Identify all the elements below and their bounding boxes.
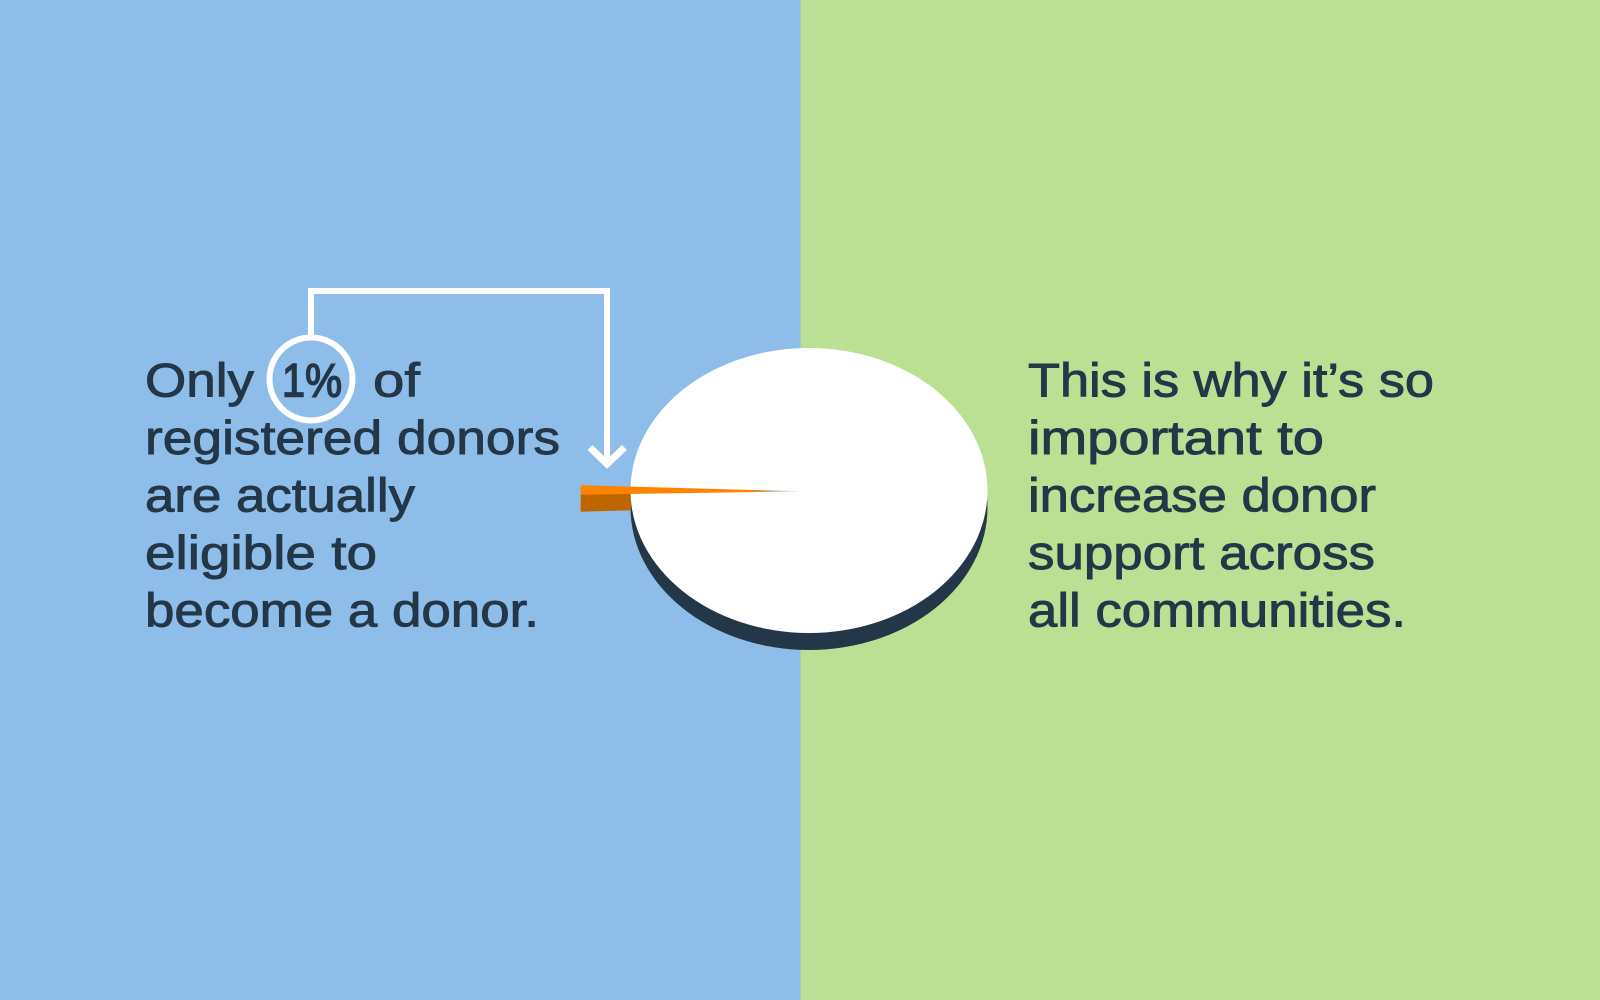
text: This is why it's so: This is why it’s so (1028, 354, 1434, 406)
text: are actually: are actually (145, 468, 416, 522)
text: of: of (373, 354, 421, 406)
panel: green right background (800, 0, 1600, 1000)
pie depth shadow (630, 365, 988, 650)
orange slice depth (581, 494, 631, 512)
text: important to: important to (1028, 411, 1324, 464)
arrow: connector from 1% to pie slice (311, 291, 624, 464)
pie top face (630, 348, 988, 633)
text: eligible to: eligible to (145, 526, 377, 579)
text: registered donors: registered donors (145, 411, 560, 464)
text: Only: Only (145, 354, 255, 406)
text: increase donor: increase donor (1028, 468, 1376, 522)
left text block (145, 354, 560, 636)
orange 1% slice (581, 485, 802, 495)
text: support across: support across (1028, 526, 1375, 579)
panel: blue left background (0, 0, 800, 1000)
pie chart (581, 348, 988, 650)
right text block (1028, 354, 1434, 636)
text: become a donor.: become a donor. (145, 584, 539, 636)
text: all communities.: all communities. (1028, 584, 1406, 636)
text: 1%: 1% (282, 354, 342, 406)
callout circle around 1% (270, 338, 352, 420)
